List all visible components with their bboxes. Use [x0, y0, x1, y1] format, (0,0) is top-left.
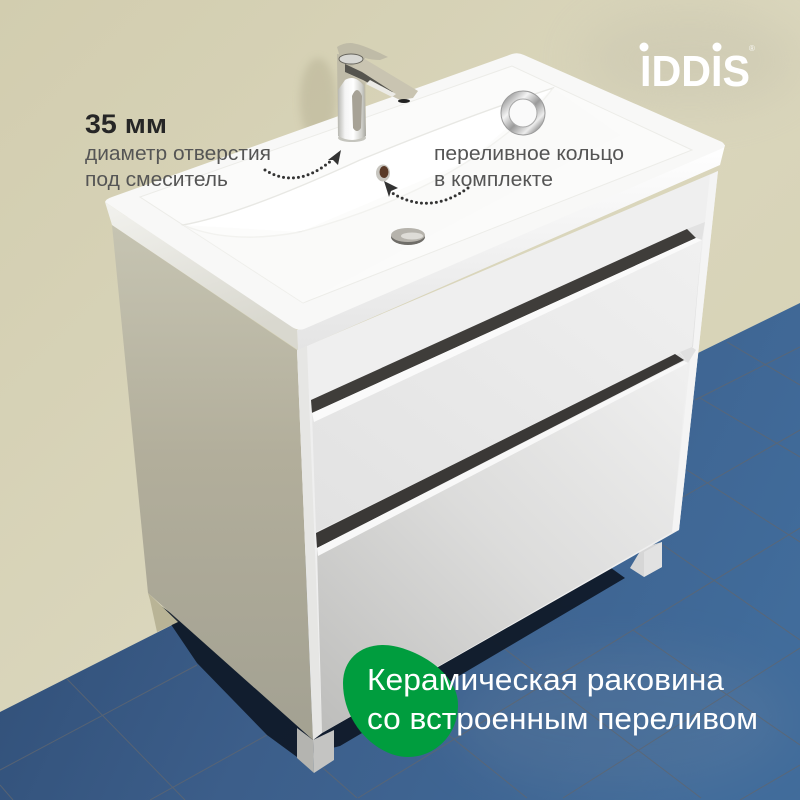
cabinet back leg — [630, 542, 662, 577]
sink plateau — [140, 66, 692, 303]
cabinet side panel — [112, 225, 313, 740]
faucet shadow on wall — [300, 58, 336, 142]
basin bowl — [183, 88, 553, 237]
sink left rim face — [105, 202, 298, 350]
faucet — [337, 43, 418, 142]
logo: IDDIS — [640, 47, 750, 96]
cabinet front frame — [297, 171, 718, 740]
faucet spout — [345, 58, 418, 100]
gap above upper drawer — [311, 222, 705, 413]
sink front lip — [297, 145, 725, 350]
value: 35 мм — [85, 109, 167, 139]
drain plug — [391, 228, 425, 245]
callout: overflow ring: переливное кольцо — [434, 142, 624, 165]
floor haze — [450, 650, 790, 790]
headline: со встроенным переливом — [367, 701, 758, 736]
shadow under cabinet — [150, 560, 625, 757]
upper drawer — [312, 238, 702, 532]
headline: Керамическая раковина — [367, 662, 725, 697]
overflow ring — [501, 91, 545, 135]
caption — [85, 142, 271, 191]
callout: overflow ring: в комплекте — [434, 168, 553, 191]
floor tile grout — [0, 342, 800, 800]
wall behind rear cabinet leg — [148, 593, 178, 632]
green blob — [343, 645, 458, 757]
overflow hole — [376, 164, 390, 182]
arrow: overflow — [384, 181, 468, 203]
headline — [367, 662, 758, 736]
faucet lever — [337, 43, 388, 60]
caption: под смеситель — [85, 168, 228, 191]
faucet body — [337, 54, 366, 140]
ceramic sink — [105, 53, 725, 350]
callout: hole diameter — [85, 109, 271, 191]
caption: диаметр отверстия — [85, 142, 271, 165]
floor with tiles — [0, 303, 800, 800]
lower drawer — [317, 361, 688, 733]
gap above lower drawer — [316, 347, 696, 548]
cabinet front leg — [297, 728, 334, 773]
sink top surface — [105, 53, 725, 330]
arrow: tap hole — [265, 150, 341, 178]
logo: ® — [749, 44, 755, 53]
callout: overflow ring — [434, 142, 624, 191]
